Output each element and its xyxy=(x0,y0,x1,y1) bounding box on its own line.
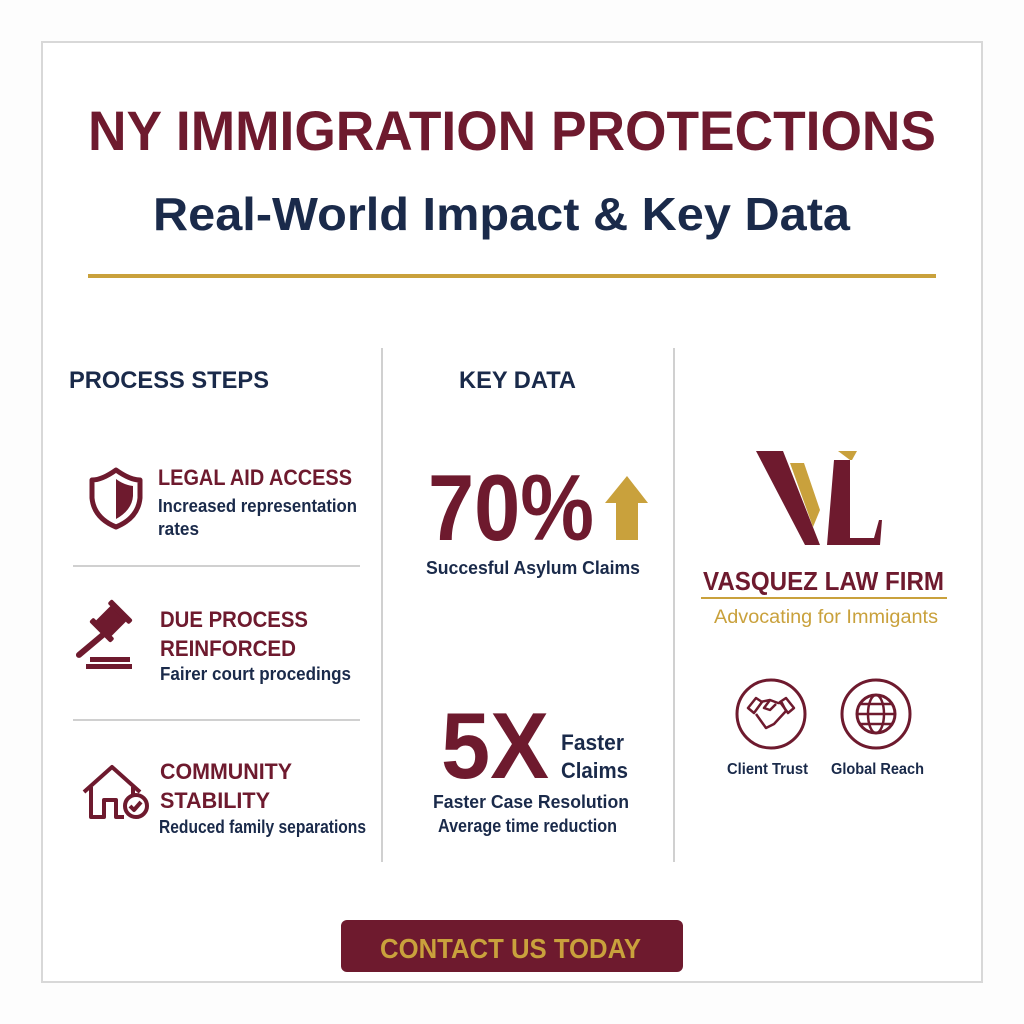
icon: gavel xyxy=(75,599,133,669)
stat: 5X: 5X xyxy=(441,693,549,798)
icon: house xyxy=(84,767,147,817)
stat: 5X xyxy=(433,693,629,836)
panel: key data xyxy=(426,367,648,836)
panel: process steps xyxy=(69,367,366,837)
title: NY IMMIGRATION PROTECTIONS xyxy=(88,99,936,162)
step: legal aid access xyxy=(158,465,357,539)
logo: VL xyxy=(756,451,882,545)
stat: 5X: Faster Case Resolution xyxy=(433,792,629,812)
stat: 70%: 70% xyxy=(428,455,594,560)
stat: 5X: Claims xyxy=(561,758,628,783)
step: legal aid access: rates xyxy=(158,519,199,539)
stat: 70%: Succesful Asylum Claims xyxy=(426,558,640,578)
icon: up arrow xyxy=(605,476,648,540)
button: contact us today xyxy=(341,920,683,972)
step: community stability: Reduced family separations xyxy=(159,817,366,837)
stat: 5X: Average time reduction xyxy=(438,816,617,836)
step: legal aid access: Increased representation xyxy=(158,496,357,516)
title xyxy=(88,99,936,240)
icon: client trust: Client Trust xyxy=(727,761,809,778)
firm name: VASQUEZ LAW FIRM xyxy=(703,566,944,596)
stat: 5X: Faster xyxy=(561,730,624,755)
step: due process: Fairer court procedings xyxy=(160,664,351,684)
step: due process: REINFORCED xyxy=(160,636,296,661)
panel: law firm xyxy=(701,451,947,778)
heading: key data: KEY DATA xyxy=(459,367,576,394)
heading: process steps: PROCESS STEPS xyxy=(69,367,269,394)
step: community stability: COMMUNITY xyxy=(160,759,292,784)
icon: client trust xyxy=(727,680,809,778)
icon: global reach xyxy=(831,680,924,778)
step: due process xyxy=(160,607,351,684)
step: legal aid access: LEGAL AID ACCESS xyxy=(158,465,352,490)
step: community stability: STABILITY xyxy=(160,788,270,813)
icon: shield xyxy=(92,470,140,527)
subtitle: Real-World Impact & Key Data xyxy=(153,188,850,240)
icon: global reach: Global Reach xyxy=(831,761,924,778)
step: due process: DUE PROCESS xyxy=(160,607,308,632)
tagline: Advocating for Immigants xyxy=(714,607,938,628)
step: community stability xyxy=(159,759,366,837)
button: contact us today: CONTACT US TODAY xyxy=(380,933,641,964)
